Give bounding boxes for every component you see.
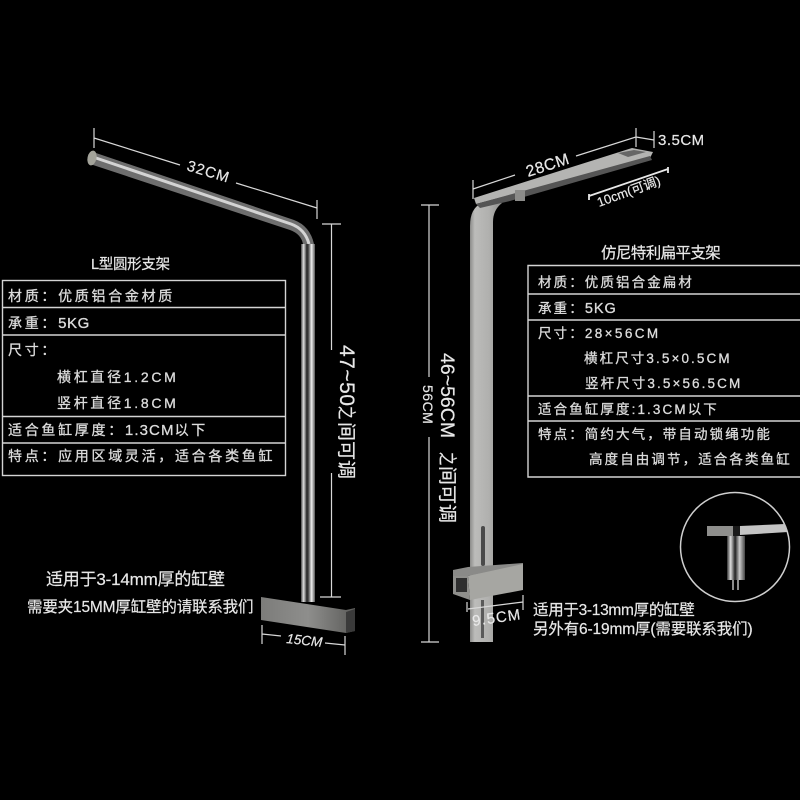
note: left bracket glass thickness: 需要夹15MM厚缸壁的请联系我们 [27,597,253,616]
spec: material: 材质：优质铝合金扁材 [538,275,694,290]
note: left bracket glass thickness: 适用于3-14mm厚的缸壁 [46,569,225,589]
spec: features: 特点：应用区域灵活，适合各类鱼缸 [8,448,275,464]
dimension: 46~56CM adjustable: 间可调 [436,466,458,523]
flat crossbar [474,148,653,204]
rod: vertical post [301,244,315,602]
dimension: 47~50 adjustable: 47~50 [335,345,358,406]
spec: crossbar size: 横杠尺寸3.5×0.5CM [584,351,732,366]
dimension: 3.5CM: 3.5CM [658,132,705,149]
spec: load: 承重：5KG [538,301,617,317]
dimension: 56CM [420,205,439,642]
adjustment slot [481,526,485,566]
spec: load: 承重：5KG [8,315,90,332]
dimension: 46~56CM adjustable: 46~56CM [436,353,458,438]
inset: bar [707,526,733,536]
dimension: 56CM: 56CM [420,385,436,424]
crossbar connector [515,190,525,201]
flat post [470,203,502,642]
dimension: 28CM: 28CM [524,151,572,181]
spec: features: 特点：简约大气，带自动锁绳功能 [538,426,772,442]
heading: left bracket: L型圆形支架 [91,256,170,273]
dimension: 9.5CM: 9.5CM [471,606,522,630]
dimension: 46~56CM adjustable [436,353,458,523]
spec: tank thickness: 适合鱼缸厚度：1.3CM以下 [8,422,208,439]
right flat bracket [453,148,653,642]
rod: horizontal arm [90,152,314,244]
dimension: 15CM [262,625,345,655]
dimension: 10cm adjustable: 10cm(可调) [595,173,662,210]
rod: end cap [86,150,98,166]
note: right bracket glass thickness: 另外有6-19mm厚(需要联系我们) [533,620,752,638]
panel: left spec table [2,280,286,476]
dimension: 15CM: 15CM [286,631,324,650]
spec: crossbar diameter: 横杠直径1.2CM [57,369,179,385]
dimension: 9.5CM [467,595,523,630]
spec: upright diameter: 竖杆直径1.8CM [57,395,179,411]
dimension: 32CM [94,128,317,219]
dimension: 47~50 adjustable: 间可调 [335,422,357,479]
clamp block [453,563,523,600]
dimension: 32CM: 32CM [185,158,232,187]
inset: peg [727,536,745,580]
spec: material: 材质：优质铝合金材质 [8,288,175,304]
left L-shaped round bracket [86,150,355,633]
dimension: 46~56CM adjustable: 之 [436,452,457,465]
dimension: 47~50 adjustable: 之 [335,406,356,419]
clamp base [261,597,355,633]
dimension: 28CM [473,128,654,199]
note: right bracket glass thickness [533,600,752,638]
inset: detail circle [680,492,790,602]
spec: tank thickness: 适合鱼缸厚度:1.3CM以下 [538,401,719,417]
spec: features continued: 高度自由调节，适合各类鱼缸 [589,451,792,467]
spec: size: 尺寸：28×56CM [538,326,661,341]
note: left bracket glass thickness [27,569,253,616]
dimension: 47~50 adjustable [320,224,358,597]
panel: right spec table [528,266,800,477]
spec: size label: 尺寸： [8,342,58,358]
heading: right bracket: 仿尼特利扁平支架 [601,244,720,262]
note: right bracket glass thickness: 适用于3-13mm厚的缸壁 [533,600,694,619]
spec: upright size: 竖杆尺寸3.5×56.5CM [585,376,742,391]
